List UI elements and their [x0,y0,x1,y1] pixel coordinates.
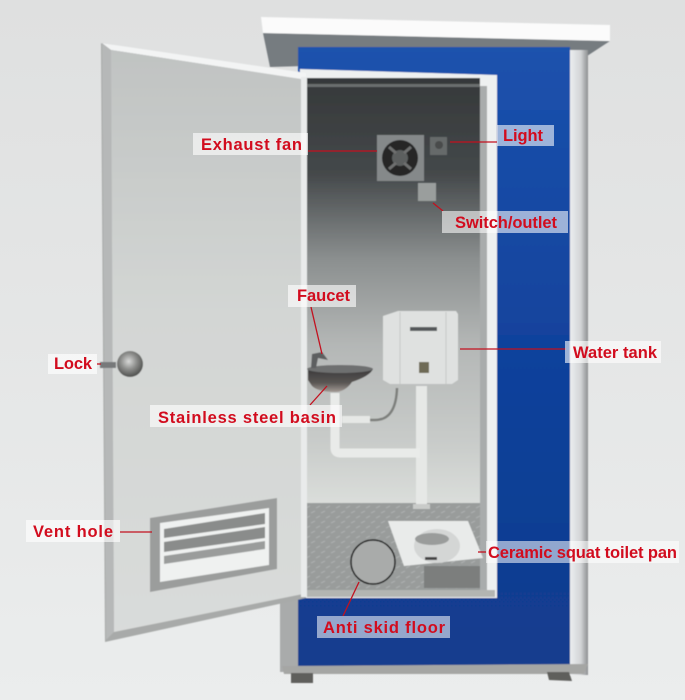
label: Lock: Lock [54,355,93,373]
label: Light: Light [503,127,544,145]
door vent [150,498,277,592]
label: Switch/outlet: Switch/outlet [455,214,558,232]
label: Lock [48,354,97,374]
label: Anti skid floor: Anti skid floor [323,619,446,637]
anti skid floor magnifier [351,540,395,584]
blue body panel [298,47,570,667]
foot right [547,672,572,681]
interior wall [307,78,480,508]
label: Faucet [288,285,356,307]
ceiling strip [307,84,480,87]
label: Faucet: Faucet [297,287,350,305]
door left edge [102,43,114,640]
door panel [111,50,303,632]
label: Vent hole: Vent hole [33,523,113,541]
leader lines [97,142,566,616]
cabin [100,17,610,683]
label: Switch/outlet [442,211,568,233]
floor [307,503,480,590]
base rail [282,664,588,674]
right inner jamb [480,86,487,592]
right corner post [570,50,588,675]
floor shadow [424,566,480,588]
label: Exhaust fan: Exhaust fan [201,136,302,154]
exhaust fan [377,135,424,181]
pipes [335,386,430,509]
label: Stainless steel basin: Stainless steel basin [158,409,336,427]
left lower post [280,596,298,672]
roof [261,17,610,41]
foot left [291,673,313,683]
door frame [300,69,497,598]
door top edge [101,43,306,80]
label: Vent hole [26,520,120,542]
light [430,137,447,155]
switch outlet [418,183,436,201]
door hinge edge [301,77,307,597]
label: Light [497,125,554,146]
roof underside [263,33,610,67]
squat toilet pan [388,521,483,566]
door knob [100,351,143,377]
door outer frame [101,43,306,642]
water tank [383,311,458,384]
floor sill [303,590,495,597]
door [100,43,307,642]
label: Water tank: Water tank [573,344,658,362]
basin [307,365,373,392]
faucet [311,352,328,368]
label: Ceramic squat toilet pan: Ceramic squat toilet pan [488,544,677,562]
